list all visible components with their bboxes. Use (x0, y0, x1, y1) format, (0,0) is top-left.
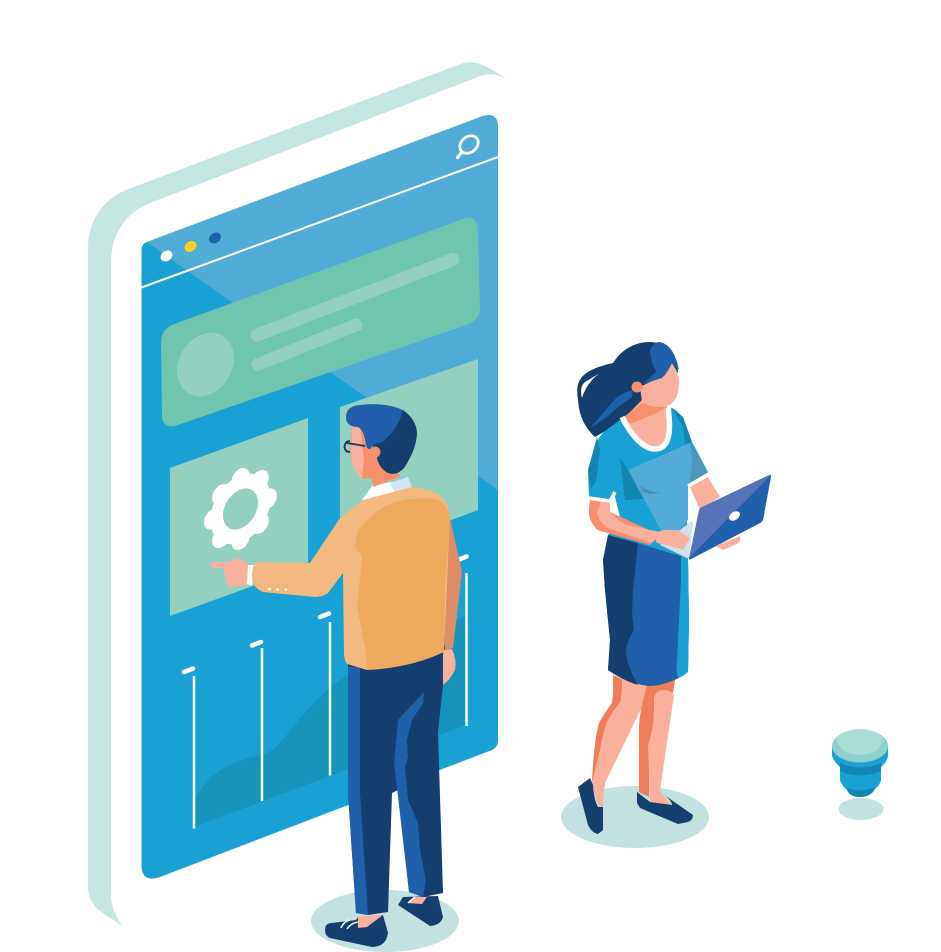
man ear (370, 446, 380, 458)
figure: woman (577, 342, 771, 834)
woman front leg (648, 690, 674, 805)
laptop keyboard (660, 520, 693, 559)
woman back leg (592, 675, 647, 807)
ground shadow: woman (561, 786, 709, 848)
header divider (142, 157, 498, 288)
pot shadow (838, 798, 884, 820)
woman sleeve reflection shade (688, 443, 708, 486)
chart bars (184, 556, 466, 828)
woman chest (625, 400, 669, 448)
woman dress top (588, 408, 708, 558)
woman bust shade reflection (640, 486, 660, 494)
man sweater (252, 487, 450, 670)
woman right forearm (690, 477, 720, 510)
man collar (362, 482, 397, 500)
phone white front (111, 74, 530, 926)
woman dress shade left (588, 437, 600, 490)
pot top (836, 729, 883, 755)
laptop lid (689, 475, 771, 559)
panel: screen (142, 115, 498, 879)
man pointing hand (210, 558, 250, 587)
chart area (194, 615, 466, 827)
man far sleeve (445, 518, 462, 650)
man sleeve buttons (268, 588, 287, 591)
pot body (832, 746, 888, 797)
woman left arm shade (589, 500, 660, 545)
figure: man (210, 404, 462, 947)
phone back edge (88, 62, 505, 926)
woman dress shade bust (620, 458, 660, 500)
man glasses (344, 441, 365, 452)
woman face (640, 362, 679, 407)
woman skirt (603, 535, 689, 686)
right tile (340, 359, 478, 562)
ground shadow: man (311, 890, 459, 952)
man sweater shade (355, 498, 450, 670)
woman hand under laptop (716, 536, 740, 550)
card text line 2 (258, 325, 356, 364)
left tile (170, 418, 308, 616)
man neck (350, 427, 400, 487)
panel: phone (88, 62, 530, 926)
woman front leg shade (639, 680, 675, 797)
man collar shade (390, 477, 412, 494)
plant pot (832, 729, 888, 820)
man shoes (325, 896, 443, 947)
woman skirt highlight (677, 556, 689, 678)
woman hair dark (577, 342, 678, 437)
woman hair light (643, 342, 679, 384)
man hair dark (372, 410, 417, 474)
icon: gear (204, 455, 277, 563)
woman dress reflection (628, 443, 708, 543)
woman cuff left (589, 492, 615, 501)
window dot blue (207, 230, 223, 246)
woman shoes (578, 778, 693, 834)
window dot white (158, 248, 175, 264)
woman hair highlight (581, 373, 600, 398)
icon: search (456, 132, 482, 158)
woman neck shadow (625, 403, 667, 424)
woman hair strand (590, 390, 633, 428)
card avatar (166, 322, 245, 407)
pot band shadows (840, 763, 881, 797)
woman sleeve shade (672, 408, 692, 444)
man trousers (348, 645, 447, 915)
window dot yellow (182, 239, 199, 254)
woman left arm (597, 501, 660, 543)
card text line 1 (257, 260, 453, 335)
laptop logo (727, 509, 742, 523)
woman collar (622, 408, 669, 449)
man hand at side (443, 649, 456, 685)
laptop lid shade (689, 475, 771, 559)
woman hand on keyboard (652, 530, 690, 550)
woman ear (632, 382, 642, 392)
screen base (142, 115, 498, 879)
man face highlight (351, 425, 364, 479)
woman skirt shade (603, 535, 638, 685)
green card (161, 218, 480, 426)
screen light reflection (147, 115, 498, 490)
woman cuff right (688, 474, 709, 486)
pot rim (832, 730, 888, 762)
man hair light (346, 404, 403, 449)
man cuff (247, 565, 254, 586)
woman back leg shade (592, 675, 622, 782)
